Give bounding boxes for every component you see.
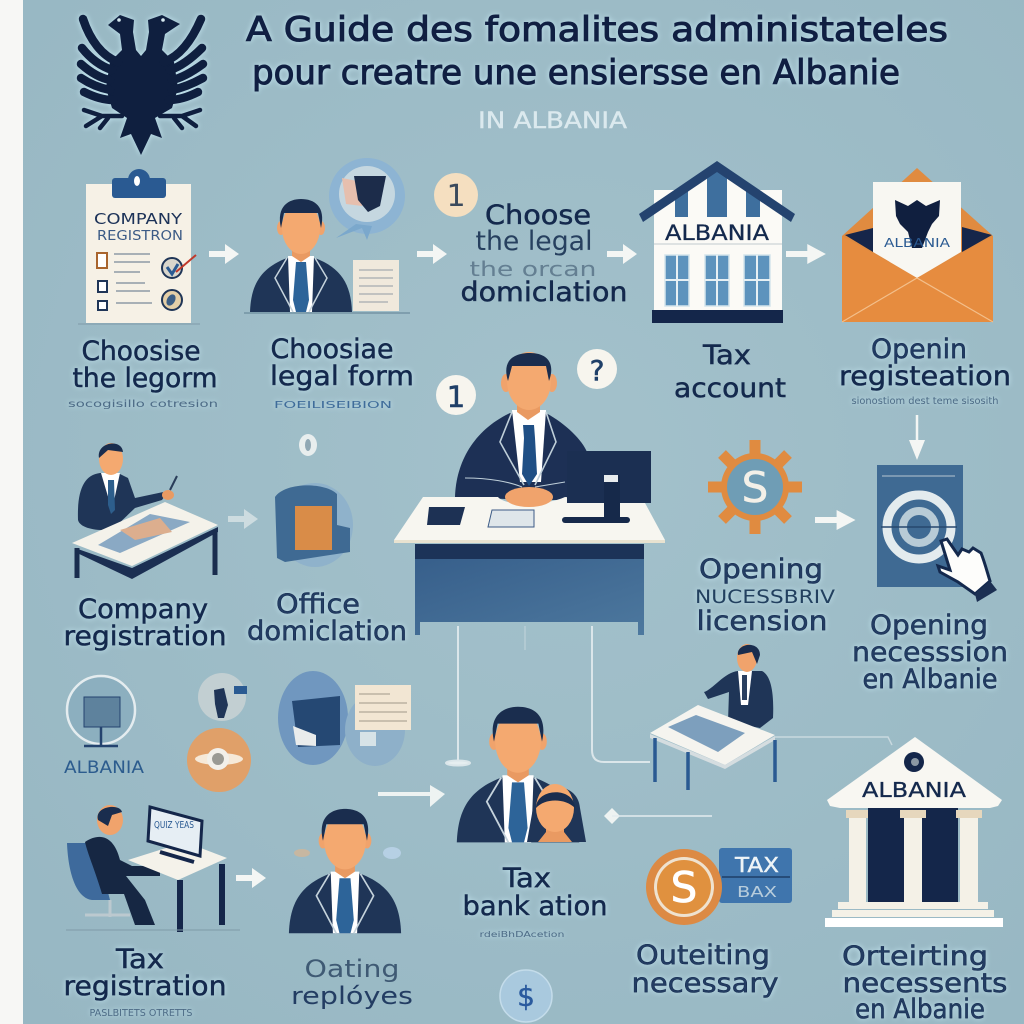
icon: person with speech bubble bbox=[244, 158, 410, 313]
label: outsourcing necessary in Albania: necessents bbox=[842, 968, 1008, 999]
label: opening registration bbox=[839, 334, 1011, 407]
icon: documents bbox=[278, 671, 411, 766]
label: choose legal form 2: legal form bbox=[270, 361, 414, 392]
number badge: 1 bbox=[446, 179, 466, 214]
label: tax account: account bbox=[674, 373, 786, 404]
subtitle: IN ALBANIA bbox=[478, 109, 627, 134]
icon: tax box bbox=[719, 848, 792, 903]
label: opening in Albania: Opening bbox=[870, 610, 988, 641]
label: choose the legal domiciliation: the orcan bbox=[470, 257, 596, 281]
label: choose the legal domiciliation: the legal bbox=[476, 226, 592, 257]
icon: orange coin: S bbox=[671, 863, 697, 912]
icon: tax box: BAX bbox=[737, 883, 777, 901]
label: company registration: registration bbox=[64, 621, 226, 652]
label: hiring employees: replóyes bbox=[291, 982, 413, 1010]
badge: number one bbox=[436, 375, 476, 415]
label: outsourcing necessary bbox=[632, 940, 779, 999]
label: opening in Albania: en Albanie bbox=[862, 664, 998, 695]
label: Albania: ALBANIA bbox=[64, 758, 144, 778]
icon: dollar coin small bbox=[500, 970, 552, 1022]
icon: clipboard checklist: COMPANY bbox=[94, 210, 183, 228]
icon: gear with dollar: S bbox=[742, 463, 768, 512]
label: tax registration: registration bbox=[64, 971, 226, 1002]
label: opening in Albania bbox=[852, 610, 1008, 695]
label: tax bank: bank ation bbox=[462, 891, 608, 922]
label: tax registration: PASLBITETS OTRETTS bbox=[90, 1008, 192, 1019]
icon: orange envelope with letter: ALBANIA bbox=[884, 236, 951, 250]
icon: employee bbox=[289, 809, 401, 933]
arrow bbox=[228, 509, 258, 529]
icon: double-headed eagle bbox=[81, 15, 203, 155]
label: outsourcing necessary in Albania: Orteirting bbox=[842, 941, 988, 972]
label: outsourcing necessary: necessary bbox=[632, 968, 779, 999]
title: A Guide des fomalites administateles bbox=[246, 10, 948, 50]
label: tax bank: rdeiBhDAcetion bbox=[480, 930, 564, 939]
label: choose legal form 2 bbox=[270, 334, 414, 411]
icon: panel with hand pointer bbox=[877, 465, 997, 602]
title: pour creatre une ensiersse en Albanie bbox=[252, 53, 900, 93]
label: choose the legal form 1: the legorm bbox=[72, 363, 218, 394]
icon: Albania house bbox=[639, 161, 795, 323]
label: opening necessary licenses: licension bbox=[696, 606, 828, 637]
label: choose the legal form 1: Choosise bbox=[82, 336, 200, 367]
label: choose the legal domiciliation: Choose bbox=[485, 200, 591, 231]
arrow bbox=[417, 244, 447, 264]
icon: Albania bank: ALBANIA bbox=[862, 778, 966, 802]
arrow: down bbox=[909, 415, 925, 460]
desk bbox=[394, 487, 665, 635]
label: opening necessary licenses: NUCESSBRIV bbox=[695, 586, 835, 608]
icon: folder bbox=[275, 434, 353, 567]
number badge bbox=[434, 173, 478, 217]
label: opening registration: registeation bbox=[839, 361, 1011, 392]
monitor bbox=[562, 451, 651, 523]
title bbox=[246, 10, 948, 93]
icon: small grey circle bbox=[198, 673, 247, 721]
icon: clipboard checklist bbox=[78, 169, 200, 324]
icon: gear with dollar bbox=[708, 440, 802, 534]
icon: orange envelope with letter bbox=[842, 168, 993, 322]
icon: person at table top-right bbox=[650, 644, 775, 790]
label: company registration bbox=[64, 594, 226, 652]
label: choose the legal form 1 bbox=[68, 336, 218, 410]
icon: orange circle bbox=[187, 728, 251, 792]
label: choose legal form 2: FOEILISEIBION bbox=[274, 400, 392, 411]
badge: question mark: ? bbox=[590, 354, 604, 387]
arrow bbox=[236, 868, 266, 888]
arrow bbox=[815, 510, 856, 530]
person: presenter bbox=[455, 352, 590, 500]
label: tax bank bbox=[462, 863, 608, 939]
icon: tax box: TAX bbox=[734, 853, 779, 877]
icon: person drawing at table bbox=[72, 443, 218, 579]
label: tax registration: Tax bbox=[115, 944, 164, 975]
label: choose the legal domiciliation bbox=[460, 200, 628, 308]
connector with dot bbox=[604, 808, 712, 824]
badge: question mark bbox=[577, 349, 617, 389]
icon: person at computer: QUIZ YEAS bbox=[154, 820, 194, 831]
label: office domiciliation: Office bbox=[276, 589, 360, 620]
icon: dollar coin small: $ bbox=[517, 980, 535, 1013]
arrow bbox=[209, 244, 239, 264]
label: opening in Albania: necesssion bbox=[852, 637, 1008, 668]
label: opening registration: Openin bbox=[871, 334, 967, 365]
label: opening necessary licenses: Opening bbox=[699, 554, 823, 585]
label: tax bank: Tax bbox=[502, 863, 551, 894]
label: hiring employees: Oating bbox=[304, 955, 400, 983]
label: company registration: Company bbox=[78, 594, 208, 625]
label: outsourcing necessary: Outeiting bbox=[636, 940, 770, 971]
icon: Albania house: ALBANIA bbox=[665, 221, 770, 245]
label: office domiciliation bbox=[247, 589, 407, 647]
central figure at desk bbox=[394, 349, 665, 635]
connector lines bbox=[446, 626, 892, 766]
icon: person with colleague bbox=[457, 707, 586, 842]
label: outsourcing necessary in Albania bbox=[842, 941, 1008, 1024]
label: tax account bbox=[674, 340, 786, 404]
icon: Albania bank bbox=[825, 737, 1003, 927]
label: opening necessary licenses bbox=[695, 554, 835, 637]
label: tax account: Tax bbox=[702, 340, 751, 371]
icon: ring with lectern bbox=[67, 676, 135, 746]
icon: orange coin bbox=[646, 849, 722, 925]
arrow: long bbox=[378, 785, 445, 807]
label: office domiciliation: domiclation bbox=[247, 616, 407, 647]
arrow bbox=[786, 244, 826, 264]
label: opening registration: sionostiom dest teme sisosith bbox=[852, 396, 998, 407]
badge: number one: 1 bbox=[447, 380, 465, 414]
label: hiring employees bbox=[291, 955, 413, 1010]
label: choose legal form 2: Choosiae bbox=[270, 334, 394, 365]
left margin strip bbox=[0, 0, 23, 1024]
label: choose the legal form 1: socogisillo cotresion bbox=[68, 399, 218, 410]
icon: clipboard checklist: REGISTRON bbox=[97, 229, 183, 244]
icon: person at computer bbox=[66, 805, 240, 932]
label: choose the legal domiciliation: domiclation bbox=[460, 277, 628, 308]
arrow bbox=[607, 244, 637, 264]
label: tax registration bbox=[64, 944, 226, 1019]
